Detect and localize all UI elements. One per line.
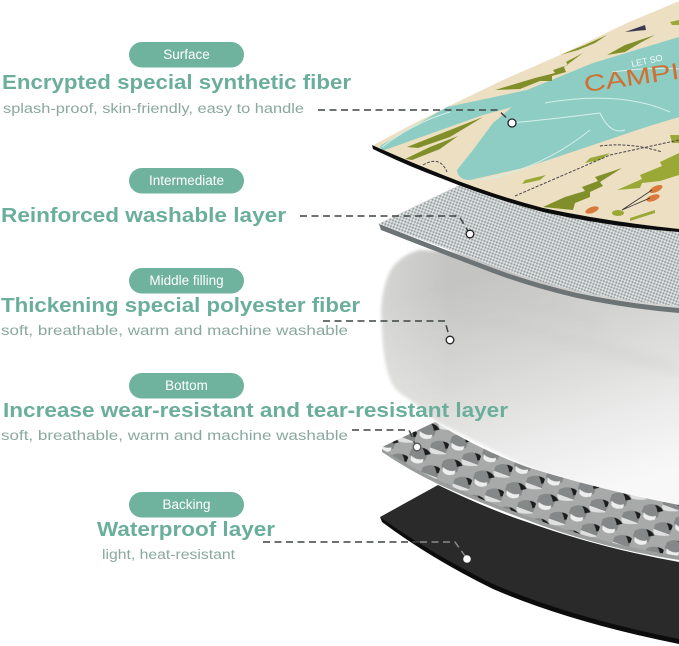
description: backing: light, heat-resistant [102,547,235,562]
callout: surface leader [318,110,516,127]
orange leaves [584,183,664,215]
layer: printed camping surface: LET SO [630,53,664,69]
layer: white thick polyester filling [382,250,679,515]
layer: bubble mesh bottom [382,422,679,560]
callout: bottom leader [352,430,421,451]
description: middle filling: soft, breathable, warm and machine washable [1,323,348,338]
lettering: CAMPI [582,58,679,97]
callout: backing leader [263,542,471,563]
pill: Intermediate: Intermediate [149,173,224,188]
black bottom edge [372,145,679,232]
trees [405,35,655,210]
heading: intermediate: Reinforced washable layer [1,205,286,227]
description: bottom: soft, breathable, warm and machine washable [1,428,348,443]
pill: Backing [129,492,244,518]
layer: grey reinforced weave [378,180,679,313]
pill: Bottom [129,373,244,398]
heading: middle filling: Thickening special polyester fiber [1,295,360,317]
callout: filling leader [323,321,454,344]
pill: Middle filling: Middle filling [149,273,224,288]
heading: backing: Waterproof layer [97,519,275,541]
label group: middle filling [1,268,360,338]
layer: black waterproof backing [380,485,679,644]
heading: bottom: Increase wear-resistant and tear-resistant layer [3,400,508,422]
pill: Bottom: Bottom [165,378,208,393]
filling body [382,250,679,515]
pill: Surface: Surface [163,47,210,62]
pill: Intermediate [129,168,244,194]
lake highlights [382,68,679,180]
pill: Middle filling [129,268,244,294]
label group: intermediate [1,168,286,227]
twigs [622,190,652,210]
label group: backing [97,492,275,562]
stitched trails [423,140,679,196]
description: surface: splash-proof, skin-friendly, easy to handle [3,101,304,116]
heading: surface: Encrypted special synthetic fiber [2,72,351,94]
filling left fade [382,250,470,440]
pill: Surface [129,42,244,68]
mat base [372,2,679,229]
label group: surface [2,42,351,116]
lake [380,37,679,180]
filling shading streaks [430,285,679,370]
label group: bottom [1,373,508,443]
layer: printed camping surface [372,2,679,232]
small tent [625,25,646,32]
callout: intermediate leader [300,216,474,238]
pill: Backing: Backing [162,497,211,512]
